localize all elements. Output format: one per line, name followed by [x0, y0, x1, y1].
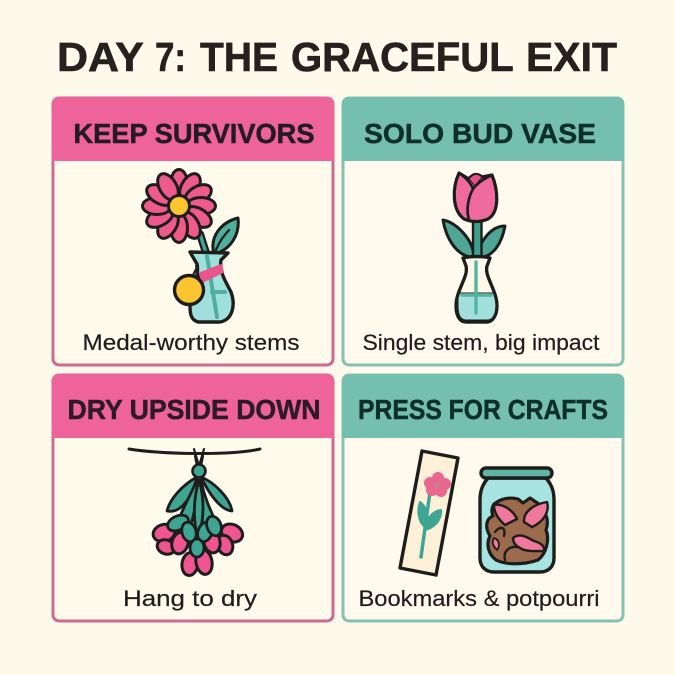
panel: keep survivors [52, 97, 334, 365]
icon: hanging dried bouquet [129, 449, 260, 577]
leaves [443, 220, 474, 258]
caption: dry upside down: Hang to dry [123, 586, 257, 611]
icon: potpourri jar [480, 468, 554, 572]
header: keep survivors: KEEP SURVIVORS [74, 118, 314, 149]
ribbon [198, 265, 223, 283]
buds [151, 521, 246, 577]
calyxes [165, 512, 224, 557]
caption: solo bud vase: Single stem, big impact [362, 330, 600, 355]
vase [190, 252, 233, 322]
leaves [167, 477, 197, 511]
stem [473, 219, 482, 259]
panel: solo bud vase [342, 97, 624, 365]
caption: keep survivors: Medal-worthy stems [82, 330, 300, 355]
icon: daisy in vase with medal [142, 170, 238, 322]
title: EXIT [526, 34, 617, 80]
knot [192, 464, 206, 478]
stem [200, 234, 207, 256]
string [129, 449, 260, 454]
header: press for crafts: PRESS FOR CRAFTS [358, 394, 608, 425]
title: GRACEFUL [291, 34, 513, 80]
potpourri [487, 498, 548, 564]
icon: pressed flower bookmark [400, 451, 458, 575]
caption: press for crafts: Bookmarks & potpourri [358, 586, 600, 611]
header: dry upside down [52, 374, 334, 438]
petals [494, 505, 517, 525]
title: DAY [57, 34, 143, 80]
title: THE [200, 34, 278, 80]
vase [456, 256, 497, 322]
header: solo bud vase: SOLO BUD VASE [364, 118, 596, 149]
leaf [213, 218, 238, 254]
panel: dry upside down [52, 374, 334, 621]
icon: tulip in bud vase [443, 173, 505, 322]
medal [174, 276, 204, 304]
header: keep survivors [52, 97, 334, 161]
panel: press for crafts [342, 374, 624, 621]
header: solo bud vase [342, 97, 624, 161]
header: press for crafts [342, 374, 624, 438]
tulip head [454, 173, 497, 222]
flower petals [142, 170, 216, 242]
header: dry upside down: DRY UPSIDE DOWN [68, 394, 320, 425]
title: 7: [155, 34, 186, 80]
